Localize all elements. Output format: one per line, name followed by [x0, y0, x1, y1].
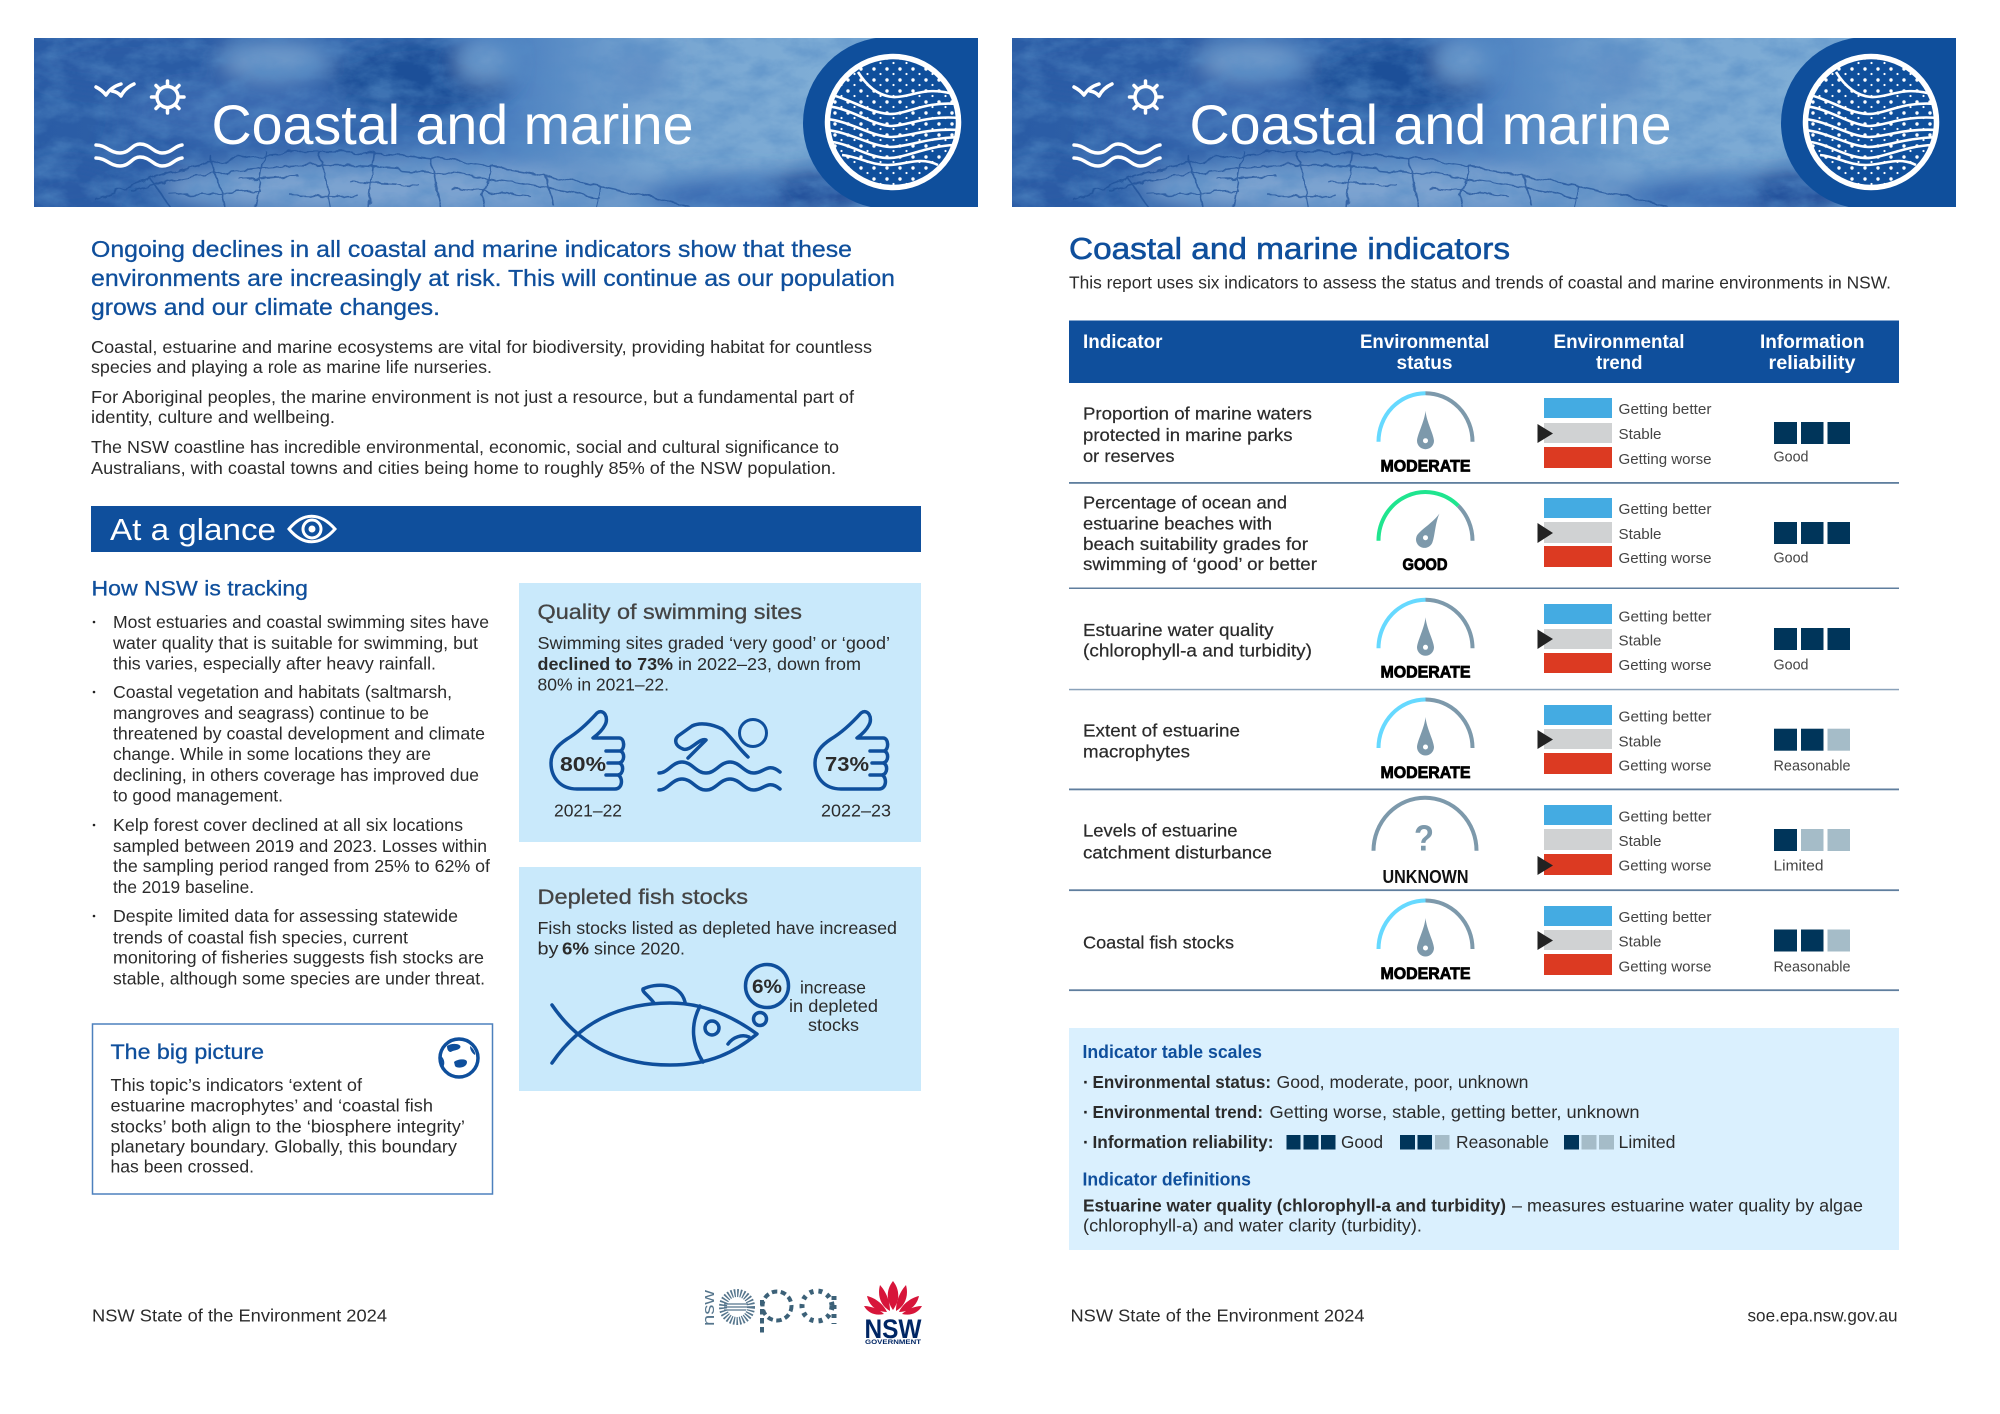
table header: status — [1396, 353, 1452, 374]
indicator name — [1083, 404, 1312, 466]
reliability: good — [1774, 422, 1850, 466]
scale: environmental status: Environmental status: — [1092, 1072, 1271, 1092]
subtitle: This report uses six indicators to assess the status and trends of coastal and marine environments in NSW. — [1069, 272, 1891, 292]
trend bars: getting worse: Stable — [1618, 834, 1662, 850]
icon: globe — [440, 1039, 478, 1077]
text: 6% — [562, 938, 589, 958]
row 3: estuarine water quality — [1083, 600, 1850, 682]
title: Coastal and marine — [212, 93, 694, 156]
indicator name: Estuarine water quality — [1083, 620, 1274, 640]
lead paragraph: Ongoing declines in all coastal and marine indicators show that these — [91, 236, 852, 262]
lead paragraph — [91, 236, 895, 320]
intro text: species and playing a role as marine life nurseries. — [91, 357, 492, 377]
indicator name: macrophytes — [1083, 742, 1190, 762]
trend bars: stable — [1538, 906, 1712, 976]
trend bars: stable: Getting better — [1618, 502, 1712, 518]
intro text: identity, culture and wellbeing. — [91, 407, 335, 427]
banner: left header — [20, 32, 978, 219]
table header: reliability — [1768, 353, 1856, 374]
gauge: good: GOOD — [1402, 555, 1448, 574]
indicator name: swimming of ‘good’ or better — [1083, 554, 1317, 574]
bullet list: to good management. — [113, 786, 283, 806]
text — [110, 1075, 465, 1176]
logo: NSW EPA: nsw — [699, 1289, 718, 1326]
trend bars: stable: Stable — [1618, 527, 1662, 543]
gauge: unknown: UNKNOWN — [1382, 866, 1468, 887]
indicator name: estuarine beaches with — [1083, 513, 1272, 533]
trend bars: stable — [1538, 498, 1712, 567]
icon: fish — [552, 985, 766, 1065]
footer: left citation: NSW State of the Environment 2024 — [92, 1306, 387, 1326]
icon: swimmer — [659, 720, 780, 790]
scale: environmental trend: Getting worse, stable, getting better, unknown — [1270, 1102, 1640, 1122]
banner: right header — [998, 32, 1956, 219]
bullet list: Kelp forest cover declined at all six locations — [113, 815, 463, 835]
trend bars: stable: Getting better — [1618, 910, 1712, 926]
gauge: unknown — [1374, 798, 1476, 887]
gauge: moderate: MODERATE — [1380, 763, 1470, 782]
bullet list: water quality that is suitable for swimming, but — [112, 633, 478, 653]
panel: the big picture — [92, 1024, 492, 1194]
text: has been crossed. — [110, 1156, 254, 1176]
bullet list: the sampling period ranged from 25% to 62% of — [113, 856, 490, 876]
scale: environmental status: Good, moderate, poor, unknown — [1276, 1072, 1528, 1092]
trend bars: stable: Stable — [1618, 634, 1662, 650]
indicator name: Levels of estuarine — [1083, 821, 1238, 841]
trend bars: stable — [1538, 398, 1712, 468]
bullet list: trends of coastal fish species, current — [113, 928, 408, 948]
gauge: moderate: MODERATE — [1380, 457, 1470, 476]
text: since 2020. — [594, 938, 685, 958]
gauge: moderate — [1378, 900, 1472, 983]
indicator name: (chlorophyll-a and turbidity) — [1083, 641, 1312, 661]
gauge: moderate: MODERATE — [1380, 964, 1470, 983]
scale: information reliability — [1083, 1132, 1676, 1152]
logo: NSW Government: NSW — [864, 1314, 922, 1344]
trend bars: stable: Stable — [1618, 735, 1662, 751]
scale: information reliability: Information reliability: — [1092, 1132, 1274, 1152]
text: stocks’ both align to the ‘biosphere integrity’ — [110, 1116, 465, 1136]
indicator name — [1083, 493, 1317, 574]
title: Coastal and marine — [1190, 93, 1672, 156]
bullet list: mangroves and seagrass) continue to be — [113, 703, 429, 723]
icon: thumbs up 73% — [815, 712, 888, 789]
heading bar: at a glance — [91, 506, 921, 552]
bullet list: threatened by coastal development and climate — [113, 724, 485, 744]
row 5: estuarine catchment disturbance — [1083, 798, 1850, 887]
scale: information reliability: Reasonable — [1456, 1132, 1549, 1152]
panel: scales and definitions — [1069, 1028, 1899, 1250]
gauge: moderate — [1378, 600, 1472, 682]
reliability: good — [1774, 628, 1850, 673]
table header: trend — [1596, 353, 1642, 374]
logo: NSW EPA — [699, 1289, 834, 1335]
bullet list: Most estuaries and coastal swimming sites have — [113, 612, 489, 632]
scale: environmental status — [1083, 1072, 1528, 1092]
indicator name — [1083, 620, 1312, 661]
icon: eye — [289, 516, 335, 542]
scale: information reliability: · — [1083, 1132, 1089, 1152]
trend bars: getting worse: Getting better — [1618, 810, 1712, 826]
gauge: good — [1378, 492, 1473, 574]
text: in 2022–23, down from — [678, 654, 861, 674]
lead paragraph: grows and our climate changes. — [91, 294, 440, 320]
intro text: For Aboriginal peoples, the marine environment is not just a resource, but a fundamental part of — [91, 387, 854, 407]
table header: Indicator — [1083, 332, 1163, 353]
definition text: (chlorophyll-a) and water clarity (turbidity). — [1083, 1216, 1422, 1236]
heading: indicator definitions: Indicator definitions — [1082, 1170, 1251, 1190]
text: increase in depleted stocks — [789, 978, 878, 1035]
panel: quality of swimming sites — [519, 583, 921, 842]
reliability: reasonable — [1774, 930, 1850, 976]
table header: Information — [1760, 332, 1864, 353]
text: planetary boundary. Globally, this boundary — [110, 1136, 457, 1156]
gauge: moderate: MODERATE — [1380, 662, 1470, 681]
scale: information reliability: Good — [1341, 1132, 1383, 1152]
bullet list: Coastal vegetation and habitats (saltmarsh, — [113, 682, 452, 702]
text: This topic’s indicators ‘extent of — [110, 1075, 362, 1095]
text: Fish stocks listed as depleted have increased — [538, 918, 897, 938]
reliability: good: Good — [1774, 551, 1808, 567]
heading: The big picture — [110, 1041, 264, 1064]
bullet list: this varies, especially after heavy rainfall. — [113, 654, 436, 674]
intro text: Coastal, estuarine and marine ecosystems are vital for biodiversity, providing habitat for countless — [91, 337, 872, 357]
definition text — [1083, 1196, 1863, 1236]
trend bars: stable — [1538, 604, 1712, 674]
trend bars: stable: Getting better — [1618, 710, 1712, 726]
indicator name: or reserves — [1083, 446, 1175, 466]
row 6: coastal fish stocks — [1083, 900, 1850, 983]
trend bars: getting worse — [1538, 805, 1712, 875]
trend bars: getting worse: Getting worse — [1618, 859, 1712, 875]
gauge: moderate — [1378, 700, 1472, 782]
bullet list: sampled between 2019 and 2023. Losses within — [113, 836, 487, 856]
lead paragraph: environments are increasingly at risk. This will continue as our population — [91, 265, 895, 291]
trend bars: stable: Getting better — [1618, 402, 1712, 418]
intro text — [91, 337, 872, 478]
gauge: unknown: ? — [1414, 818, 1434, 859]
indicator name: beach suitability grades for — [1083, 534, 1308, 554]
text — [538, 633, 890, 694]
heading: Depleted fish stocks — [538, 886, 748, 909]
callout: 6%: 6% — [752, 977, 782, 998]
scale: environmental status: · — [1083, 1072, 1089, 1092]
label: 2022-23: 2022–23 — [821, 800, 891, 820]
text: declined to 73% — [538, 654, 673, 674]
label: 2021-22: 2021–22 — [554, 800, 622, 820]
indicator name: catchment disturbance — [1083, 842, 1272, 862]
heading bar: at a glance: At a glance — [110, 512, 276, 547]
heading: how NSW is tracking: How NSW is tracking — [92, 578, 308, 601]
trend bars: stable: Getting worse — [1618, 452, 1712, 468]
intro text: Australians, with coastal towns and cities being home to roughly 85% of the NSW population. — [91, 458, 836, 478]
bullet list — [93, 612, 490, 988]
row 2: beach suitability — [1083, 492, 1850, 574]
reliability: good: Good — [1774, 657, 1808, 673]
callout: 6% — [746, 964, 788, 1008]
text: estuarine macrophytes’ and ‘coastal fish — [110, 1096, 433, 1116]
logo: NSW Government: GOVERNMENT — [865, 1340, 921, 1346]
gauge: moderate — [1378, 393, 1472, 476]
row 1: marine waters protected — [1083, 393, 1850, 476]
trend bars: stable: Getting worse — [1618, 960, 1712, 976]
indicator name: Proportion of marine waters — [1083, 404, 1312, 424]
bullet list: change. While in some locations they are — [113, 744, 431, 764]
reliability: good: Good — [1774, 450, 1808, 466]
bullet list: the 2019 baseline. — [113, 877, 254, 897]
row 4: extent of estuarine macrophytes — [1083, 700, 1850, 782]
trend bars: stable: Stable — [1618, 935, 1662, 951]
indicator name — [1083, 721, 1240, 762]
text: 80% in 2021–22. — [538, 674, 669, 694]
icon: thumbs up 80%: 80% — [560, 754, 606, 776]
panel: depleted fish stocks — [519, 867, 921, 1091]
trend bars: stable: Stable — [1618, 427, 1662, 443]
definition text: Estuarine water quality (chlorophyll-a and turbidity) — [1083, 1196, 1506, 1216]
bullet list: monitoring of fisheries suggests fish stocks are — [113, 948, 484, 968]
indicator name — [1083, 821, 1272, 862]
reliability: limited: Limited — [1774, 859, 1824, 875]
bullet list: declining, in others coverage has improved due — [113, 765, 479, 785]
definition text: – measures estuarine water quality by algae — [1512, 1196, 1863, 1216]
trend bars: stable — [1538, 705, 1712, 775]
heading: Quality of swimming sites — [538, 601, 802, 624]
icon: thumbs up 73%: 73% — [825, 754, 869, 776]
heading: indicator table scales: Indicator table scales — [1082, 1042, 1262, 1062]
table header: Environmental — [1360, 332, 1490, 353]
text: increase in depleted stocks: increase — [800, 978, 866, 998]
indicator name: Extent of estuarine — [1083, 721, 1240, 741]
indicator name: protected in marine parks — [1083, 425, 1293, 445]
trend bars: stable: Getting better — [1618, 610, 1712, 626]
trend bars: stable: Getting worse — [1618, 658, 1712, 674]
text: Swimming sites graded ‘very good’ or ‘good’ — [538, 633, 890, 653]
reliability: limited — [1774, 829, 1850, 875]
table header: Environmental — [1554, 332, 1684, 353]
indicator name: Percentage of ocean and — [1083, 493, 1287, 513]
bullet list: stable, although some species are under threat. — [113, 968, 485, 988]
text: increase in depleted stocks: in depleted — [789, 996, 878, 1016]
footer: website: soe.epa.nsw.gov.au — [1748, 1306, 1898, 1326]
icon: thumbs up 80% — [551, 712, 624, 789]
footer: right citation: NSW State of the Environment 2024 — [1070, 1306, 1365, 1326]
reliability: reasonable: Reasonable — [1774, 960, 1850, 976]
heading: coastal and marine indicators: Coastal and marine indicators — [1069, 231, 1510, 266]
indicator name: Coastal fish stocks — [1083, 932, 1234, 952]
text: by — [538, 938, 559, 958]
logo: NSW Government — [864, 1281, 922, 1346]
reliability: good — [1774, 522, 1850, 567]
text — [538, 918, 897, 958]
bullet list: Despite limited data for assessing statewide — [113, 906, 458, 926]
scale: information reliability: Limited — [1618, 1132, 1676, 1152]
trend bars: stable: Getting worse — [1618, 759, 1712, 775]
intro text: The NSW coastline has incredible environmental, economic, social and cultural significance to — [91, 437, 839, 457]
scale: environmental trend: Environmental trend: — [1092, 1102, 1263, 1122]
reliability: reasonable — [1774, 729, 1850, 775]
trend bars: stable: Getting worse — [1618, 551, 1712, 567]
table header — [1069, 320, 1899, 383]
reliability: reasonable: Reasonable — [1774, 759, 1850, 775]
text: increase in depleted stocks: stocks — [808, 1015, 859, 1035]
scale: environmental trend — [1083, 1102, 1640, 1122]
scale: environmental trend: · — [1083, 1102, 1089, 1122]
